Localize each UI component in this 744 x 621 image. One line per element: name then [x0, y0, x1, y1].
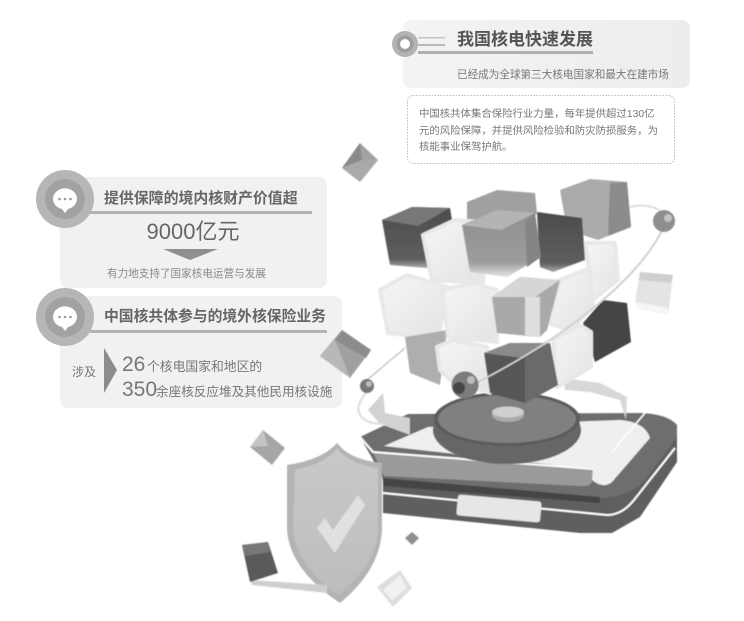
- panel: China's rapid nuclear power development: [392, 20, 690, 88]
- illustration: floating cube beside panel: [320, 330, 371, 378]
- illustration: floating glass cube right: [635, 272, 673, 315]
- description text: 中国核共体集合保险行业力量，每年提供超过130亿: [419, 107, 655, 120]
- label: 涉及: 涉及: [72, 365, 96, 379]
- stat text: 个核电国家和地区的: [147, 359, 262, 374]
- caption: 有力地支持了国家核电运营与发展: [107, 267, 266, 280]
- illustration: orbit with spheres: [360, 210, 675, 398]
- heading: 提供保障的境内核财产价值超: [104, 189, 298, 207]
- heading: 我国核电快速发展: [457, 29, 593, 49]
- illustration: small floating cubes near shield: [242, 430, 419, 607]
- panel: domestic nuclear property value: [36, 170, 327, 288]
- heading: 中国核共体参与的境外核保险业务: [104, 307, 326, 325]
- panel: overseas nuclear insurance: [36, 288, 342, 408]
- arrow: down: [163, 249, 218, 260]
- illustration: platform: [360, 413, 677, 533]
- arrow: right: [104, 348, 117, 393]
- stat text: 350: [122, 378, 157, 401]
- description text: 核能事业保驾护航。: [419, 140, 513, 153]
- panel: dotted description box: [408, 96, 674, 164]
- icon: speech bubble badge: [392, 31, 593, 57]
- label plate: [456, 494, 542, 523]
- icon: speech bubble badge: [36, 170, 94, 228]
- illustration: shield with check mark: [287, 443, 382, 603]
- value: 9000亿元: 9000亿元: [147, 219, 239, 244]
- illustration: ribbons and orbit: [358, 206, 660, 435]
- description text: 元的风险保障，并提供风险检验和防灾防损服务，为: [419, 124, 658, 137]
- stat text: 余座核反应堆及其他民用核设施: [156, 384, 333, 399]
- subheading: 已经成为全球第三大核电国家和最大在建市场: [457, 68, 669, 81]
- check mark: [317, 495, 365, 553]
- stat text: 26: [122, 353, 145, 376]
- illustration: central disc: [433, 392, 581, 464]
- illustration: cube stack: [380, 179, 631, 403]
- icon: speech bubble badge: [36, 288, 94, 346]
- illustration: floating cube top: [342, 143, 378, 182]
